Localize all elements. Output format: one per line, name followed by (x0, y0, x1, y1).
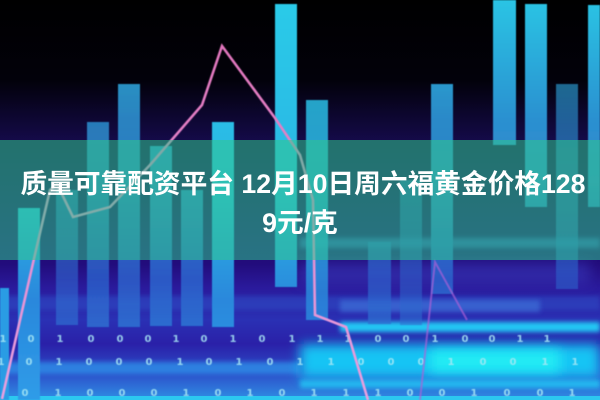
binary digits: 0 (259, 334, 266, 345)
binary digits: 0 (537, 388, 544, 399)
binary digits: 1 (544, 334, 551, 345)
binary digits: 1 (236, 357, 243, 368)
binary digits: 1 (432, 334, 439, 345)
binary digits: 1 (517, 334, 524, 345)
binary digits: 0 (358, 357, 365, 368)
binary digits: 0 (151, 388, 158, 399)
binary digits: 0 (375, 334, 382, 345)
binary digits: 0 (146, 357, 153, 368)
binary digits: 0 (267, 357, 274, 368)
binary digits: 0 (504, 388, 511, 399)
binary digits: 0 (480, 357, 487, 368)
binary digits: 0 (462, 334, 469, 345)
binary digits: 1 (569, 388, 576, 399)
title: 9元/克 (262, 208, 338, 238)
binary digits: 0 (88, 334, 95, 345)
binary digits: 0 (119, 388, 126, 399)
binary digits: 1 (247, 388, 254, 399)
binary digits: 0 (388, 357, 395, 368)
binary digits: 1 (572, 357, 579, 368)
binary digits: 1 (542, 357, 549, 368)
binary digits: 1 (375, 388, 382, 399)
binary digits: 1 (57, 334, 64, 345)
title: 质量可靠配资平台 12月10日周六福黄金价格128 (20, 169, 586, 199)
binary digits: 1 (448, 357, 455, 368)
binary digits: 0 (87, 388, 94, 399)
binary digits: 1 (230, 334, 237, 345)
glowing horizontal light streaks (0, 238, 600, 400)
binary digits: 0 (206, 357, 213, 368)
binary digits: 0 (215, 388, 222, 399)
binary digits: 1 (173, 334, 180, 345)
binary digits: 0 (201, 334, 208, 345)
binary digits: 1 (471, 388, 478, 399)
binary digits: 1 (55, 388, 62, 399)
title (20, 169, 586, 238)
binary digits: 0 (279, 388, 286, 399)
line chart: faint secondary line (420, 262, 467, 400)
binary digits: 1 (56, 357, 63, 368)
binary digits: 0 (22, 388, 29, 399)
binary digits: 1 (177, 357, 184, 368)
binary digits: 0 (510, 357, 517, 368)
binary digits: 1 (311, 388, 318, 399)
binary digits: 1 (328, 357, 335, 368)
binary digits: 1 (345, 334, 352, 345)
binary digits: 0 (28, 334, 35, 345)
binary digits: 1 (297, 357, 304, 368)
binary digits: 1 (317, 334, 324, 345)
binary digits: 1 (289, 334, 296, 345)
line chart: main pink trend line (2, 46, 368, 400)
binary digits: 0 (26, 357, 33, 368)
binary digits: 0 (407, 388, 414, 399)
binary digits: 0 (489, 334, 496, 345)
binary digits: 1 (183, 388, 190, 399)
binary digits: 0 (116, 357, 123, 368)
binary digits: 0 (145, 334, 152, 345)
binary digits: 0 (117, 334, 124, 345)
binary digits: 0 (403, 334, 410, 345)
translucent title band (0, 140, 600, 260)
binary digits (0, 334, 579, 399)
binary digits: 0 (418, 357, 425, 368)
binary digits: 0 (86, 357, 93, 368)
binary digits: 1 (343, 388, 350, 399)
binary digits: 0 (439, 388, 446, 399)
